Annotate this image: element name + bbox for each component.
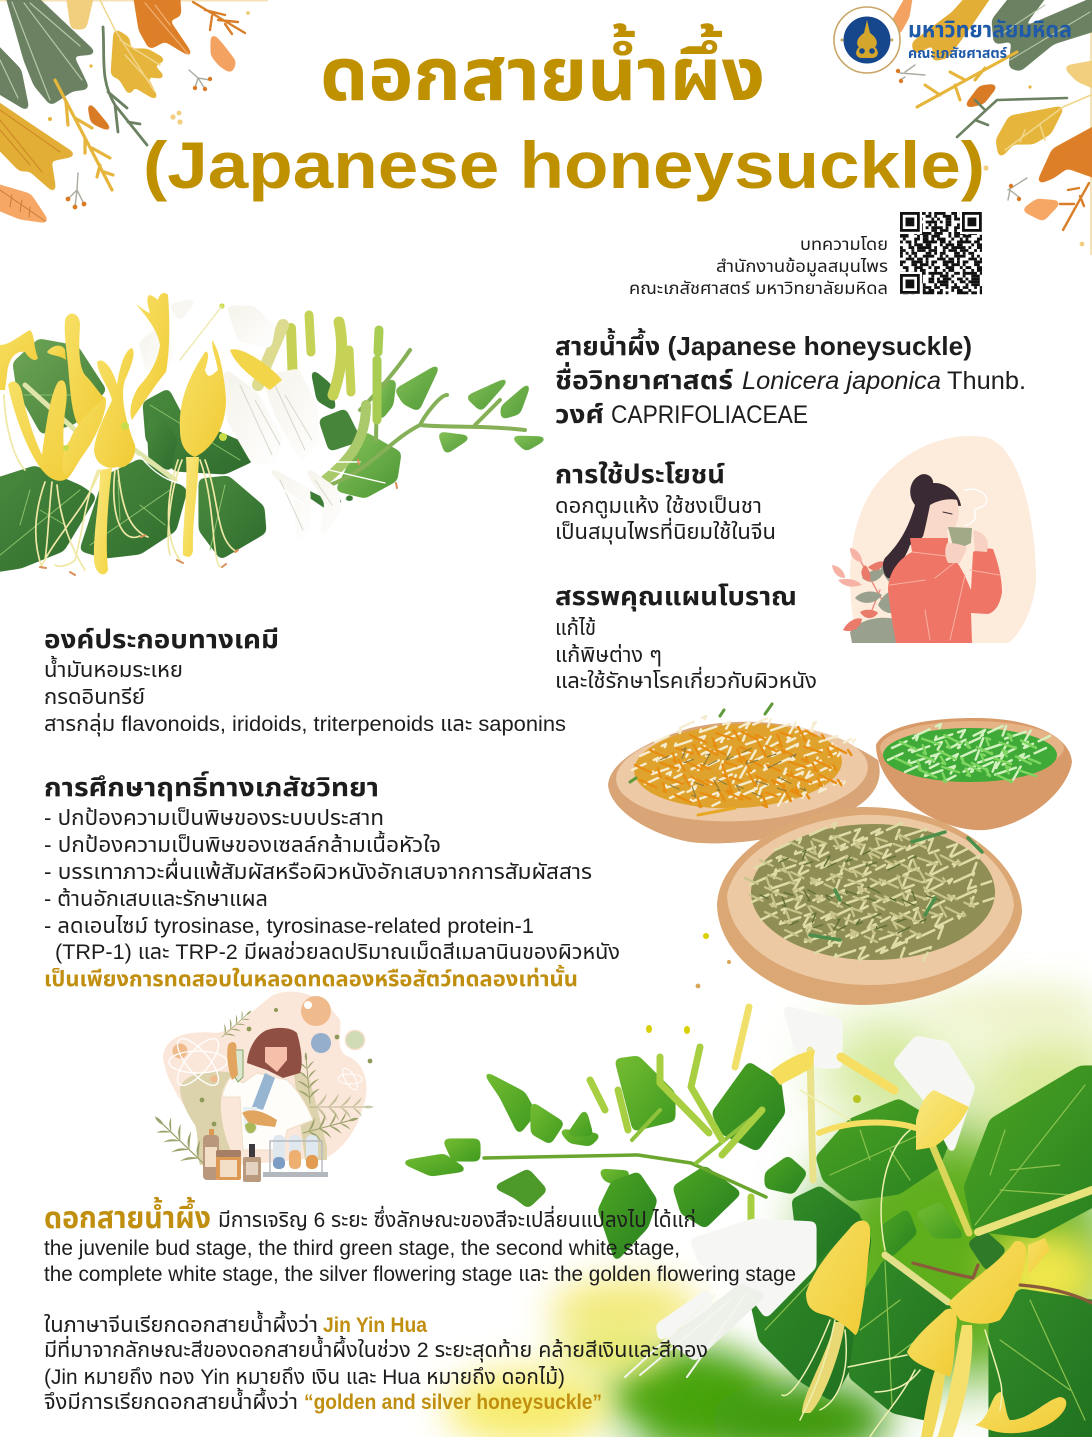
jars	[203, 1129, 261, 1182]
plants	[144, 1004, 374, 1174]
section: uses	[555, 459, 776, 545]
photo: dried honeysuckle in three wooden plates	[608, 704, 1072, 1005]
illustration: woman drinking tea	[832, 436, 1036, 643]
yellow-green buds	[258, 315, 379, 480]
section: growth stages: ดอกสายน้ำผึ้ง	[44, 1196, 211, 1235]
title	[143, 23, 985, 202]
spheres and atoms	[169, 996, 372, 1126]
article credit	[629, 235, 888, 298]
sweater	[888, 538, 1002, 643]
section: pharmacological studies: - ต้านอักเสบและรักษาแผล	[44, 887, 268, 911]
section: pharmacological studies: (TRP-1) และ TRP-2 มีผลช่วยลดปริมาณเม็ดสีเมลานินของผิวหนัง	[55, 939, 620, 964]
section: uses: ดอกตูมแห้ง ใช้ชงเป็นชา	[555, 494, 762, 519]
section: chemical constituents	[44, 624, 566, 737]
stamens	[4, 395, 237, 570]
section: Chinese name: Jin Yin Hua	[323, 1314, 427, 1337]
plant identity: วงศ์	[555, 399, 604, 429]
section: chemical constituents: สารกลุ่ม flavonoids, iridoids, triterpenoids และ saponins	[44, 712, 566, 737]
section: uses: เป็นสมุนไพรที่นิยมใช้ในจีน	[555, 517, 776, 545]
yellow flowers	[0, 293, 282, 574]
section: traditional properties: แก้ไข้	[555, 616, 596, 640]
leaves	[0, 340, 547, 572]
section: pharmacological studies: - ลดเอนไซม์ tyrosinase, tyrosinase-related protein-1	[44, 915, 534, 938]
section: growth stages: the juvenile bud stage, the third green stage, the second white stage,	[44, 1237, 680, 1260]
photo: honeysuckle branch upper left	[0, 293, 547, 575]
section: growth stages	[44, 1196, 796, 1286]
title: (Japanese honeysuckle)	[143, 128, 985, 202]
section: pharmacological studies: การศึกษาฤทธิ์ทางเภสัชวิทยา	[44, 771, 379, 802]
cup	[948, 527, 972, 546]
bowl: fresh green buds	[876, 718, 1072, 830]
white flowers	[657, 1007, 974, 1360]
section: pharmacological studies: - ปกป้องความเป็นพิษของระบบประสาท	[44, 807, 384, 830]
title: ดอกสายน้ำผึ้ง	[320, 23, 765, 116]
section: traditional properties: สรรพคุณแผนโบราณ	[555, 581, 797, 612]
pale flower tubes	[735, 1007, 1092, 1302]
hair	[883, 474, 961, 578]
article credit: สำนักงานข้อมูลสมุนไพร	[716, 256, 888, 278]
plate: golden dried flowers	[608, 704, 880, 843]
section: traditional properties	[555, 581, 817, 693]
plant identity: Thunb.	[947, 367, 1026, 395]
leaves	[402, 1057, 1092, 1437]
section: pharmacological studies: - ปกป้องความเป็นพิษของเซลล์กล้ามเนื้อหัวใจ	[44, 830, 441, 857]
plant identity	[555, 328, 1026, 429]
logo wordmark	[908, 17, 1072, 61]
section: Chinese name: มีที่มาจากลักษณะสีของดอกสายน้ำผึ้งในช่วง 2 ระยะสุดท้าย คล้ายสีเงินและสีทอง	[44, 1335, 708, 1363]
section: Chinese name: (Jin หมายถึง ทอง Yin หมายถึง เงิน และ Hua หมายถึง ดอกไม้)	[44, 1365, 565, 1389]
scientist	[222, 1028, 313, 1150]
stems and brown branch	[484, 1110, 1092, 1303]
plant identity: สายน้ำผึ้ง (Japanese honeysuckle)	[555, 328, 972, 361]
article credit: คณะเภสัชศาสตร์ มหาวิทยาลัยมหิดล	[629, 279, 888, 298]
section: growth stages: the complete white stage, the silver flowering stage และ the golden flowering stage	[44, 1263, 796, 1286]
QR code	[900, 212, 982, 294]
white flowers	[140, 300, 340, 540]
plant identity: Lonicera japonica	[742, 367, 941, 395]
logo: Mahidol University seal	[834, 7, 900, 73]
section: chemical constituents: กรดอินทรีย์	[44, 686, 145, 709]
illustration: scientist with flask	[144, 992, 374, 1182]
section: Chinese name: “golden and silver honeysuckle”	[304, 1391, 602, 1414]
section: pharmacological studies: เป็นเพียงการทดสอบในหลอดทดลองหรือสัตว์ทดลองเท่านั้น	[44, 965, 578, 991]
decorative leaves: top right corner	[892, 0, 1092, 255]
plate: olive dried buds	[717, 807, 1022, 1005]
stems	[330, 340, 525, 485]
face	[922, 499, 959, 540]
section: chemical constituents: น้ำมันหอมระเหย	[44, 655, 183, 682]
side plant	[832, 548, 897, 643]
blurred green and yellow photo background	[445, 988, 1092, 1437]
section: growth stages: มีการเจริญ 6 ระยะ ซึ่งลักษณะของสีจะเปลี่ยนแปลงไป ได้แก่	[218, 1205, 696, 1232]
article credit: บทความโดย	[800, 235, 888, 254]
section: Chinese name: จึงมีการเรียกดอกสายน้ำผึ้งว่า	[44, 1387, 298, 1414]
green buds	[590, 1047, 762, 1230]
plant identity: CAPRIFOLIACEAE	[611, 401, 808, 429]
section: Chinese name: ในภาษาจีนเรียกดอกสายน้ำผึ้งว่า	[44, 1310, 318, 1337]
section: Chinese name	[44, 1310, 708, 1414]
yellow flowers	[770, 1050, 1066, 1437]
section: pharmacological studies	[44, 771, 620, 991]
photo: honeysuckle branch bottom right	[402, 1007, 1092, 1437]
section: traditional properties: และใช้รักษาโรคเกี่ยวกับผิวหนัง	[555, 666, 817, 693]
test tubes	[263, 1135, 328, 1177]
section: chemical constituents: องค์ประกอบทางเคมี	[44, 624, 279, 654]
decorative leaves: top left corner	[0, 0, 268, 222]
section: traditional properties: แก้พิษต่าง ๆ	[555, 643, 662, 667]
logo wordmark: มหาวิทยาลัยมหิดล	[908, 17, 1072, 42]
section: uses: การใช้ประโยชน์	[555, 459, 725, 489]
stamens	[782, 1090, 1002, 1437]
stray stamen tips and petals over text area	[646, 933, 861, 1103]
section: pharmacological studies: - บรรเทาภาวะผื่นแพ้สัมผัสหรือผิวหนังอักเสบจากการสัมผัสสาร	[44, 857, 592, 884]
logo wordmark: คณะเภสัชศาสตร์	[908, 45, 1007, 61]
plant identity: ชื่อวิทยาศาสตร์	[555, 362, 733, 395]
